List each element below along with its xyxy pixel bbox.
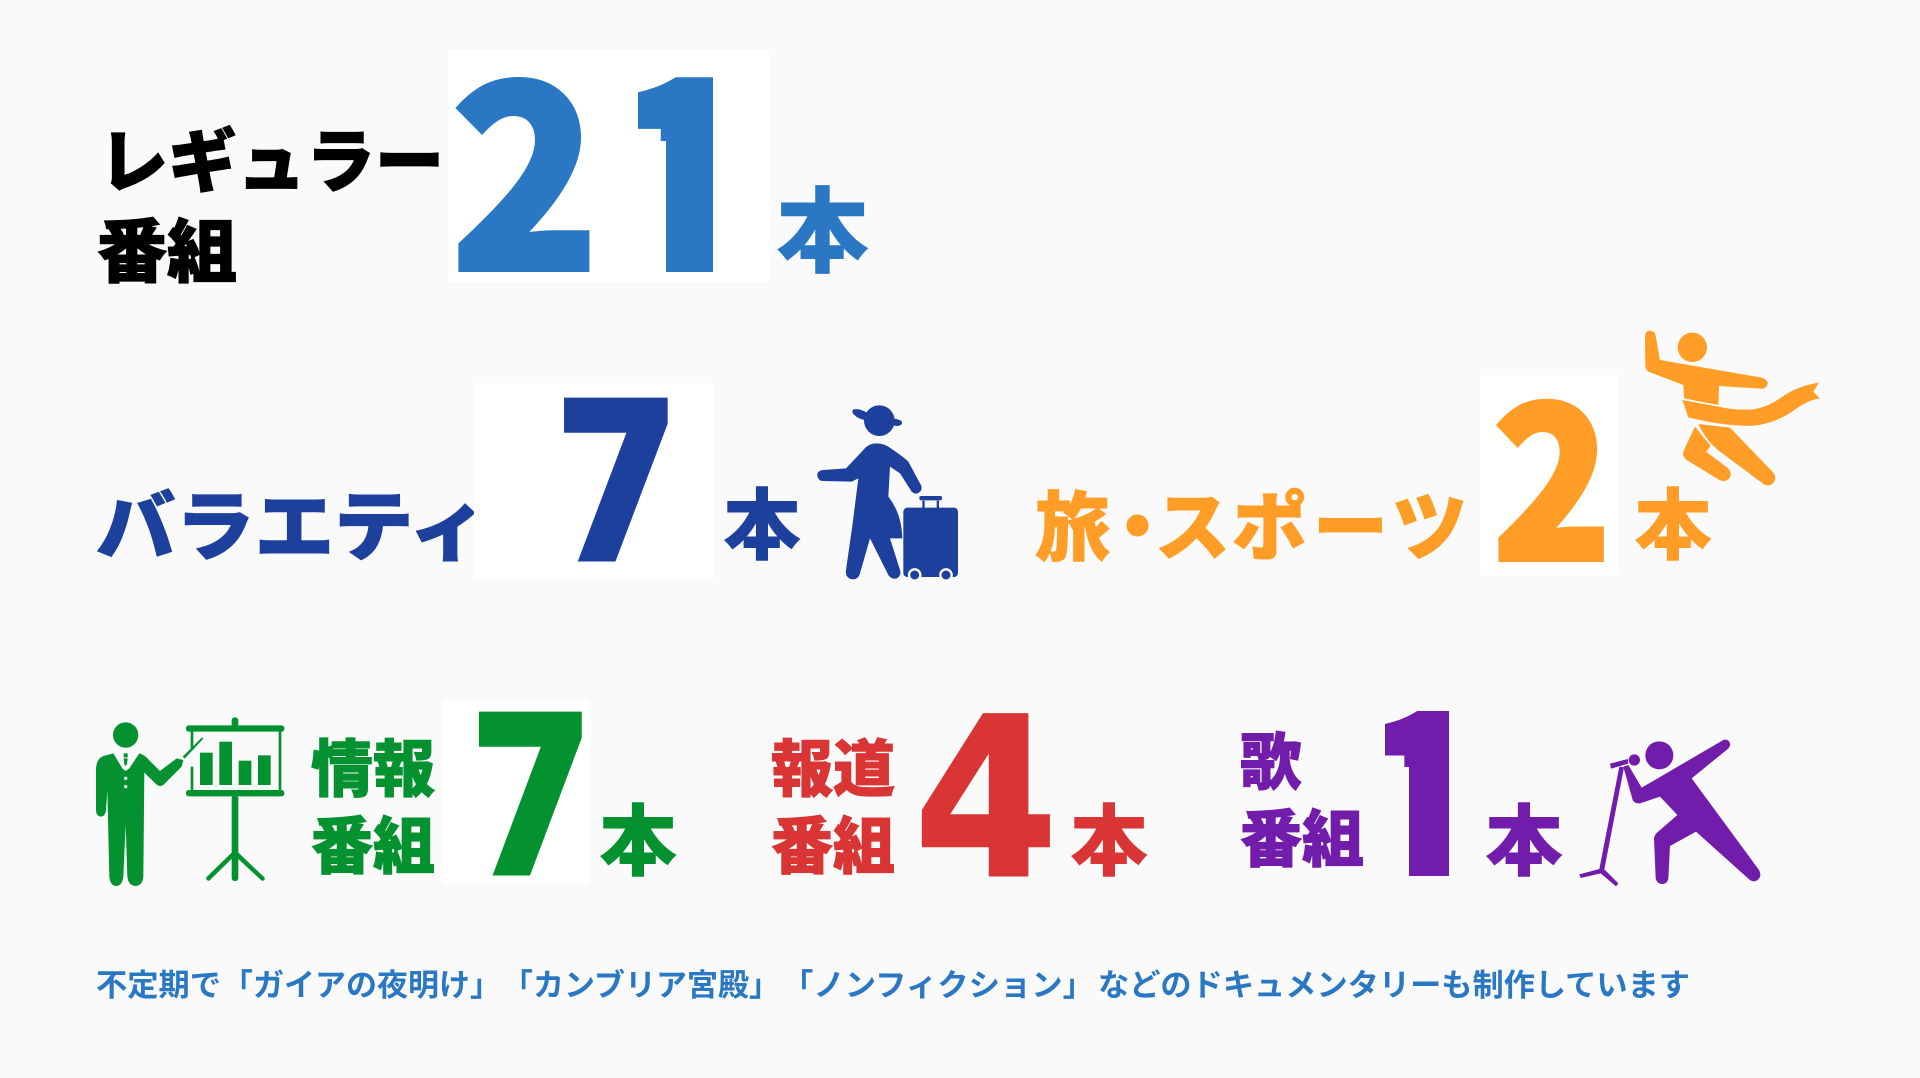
number panel: 7: 7 xyxy=(469,672,594,925)
footnote: 「ノンフィクション」 xyxy=(782,968,1094,1003)
row: regular programmes 21 xyxy=(97,77,868,284)
unit: 本: 本 xyxy=(1070,798,1148,886)
heading: news programmes: 番組 xyxy=(771,813,895,882)
icon: traveller with suitcase xyxy=(817,405,958,581)
row: music 1 xyxy=(1240,711,1760,886)
number: 4: 4 xyxy=(914,671,1058,927)
heading: variety: バラエティ xyxy=(96,486,488,571)
heading: news programmes xyxy=(771,736,895,882)
heading: information programmes: 番組 xyxy=(311,813,435,882)
row: travel and sports 2 xyxy=(1035,317,1820,621)
heading: music programmes xyxy=(1240,729,1364,875)
heading: information programmes xyxy=(311,736,435,882)
row: information 7 xyxy=(96,672,677,925)
footnote: などのドキュメンタリーも制作しています xyxy=(1098,968,1690,1003)
icon: singer at microphone xyxy=(1579,740,1760,886)
heading: regular programmes: レギュラー xyxy=(99,124,444,201)
unit: 本: 本 xyxy=(599,798,677,886)
footnote: 不定期で xyxy=(96,968,221,1003)
icon: presenter with chart xyxy=(96,717,284,886)
number panel: 7: 7 xyxy=(554,358,680,611)
number: 1: 1 xyxy=(1354,625,1492,938)
heading: information programmes: 情報 xyxy=(311,736,435,805)
unit: 本: 本 xyxy=(1634,482,1712,570)
number panel: 2: 2 xyxy=(1492,317,1612,621)
unit: 本: 本 xyxy=(723,482,801,570)
heading: news programmes: 報道 xyxy=(771,736,895,805)
heading: travel and sports: 旅・スポーツ xyxy=(1035,486,1467,570)
row: variety 7 xyxy=(96,358,958,611)
footnote: 「ガイアの夜明け」 xyxy=(222,968,501,1003)
heading: music programmes: 歌 xyxy=(1240,729,1302,798)
unit: 本: 本 xyxy=(1485,798,1563,886)
number panel: 7 xyxy=(474,358,714,611)
unit: 本: 本 xyxy=(776,181,869,285)
number panel: 7 xyxy=(442,672,594,925)
infographic canvas xyxy=(96,77,1820,999)
number panel: 21 xyxy=(456,77,713,272)
icon: runner crossing finish tape xyxy=(1645,331,1820,486)
heading: regular programmes xyxy=(97,124,444,291)
footnote: 「カンブリア宮殿」 xyxy=(502,968,780,1003)
heading: music programmes: 番組 xyxy=(1240,806,1364,875)
row: news 4 xyxy=(771,671,1148,927)
heading: regular programmes: 番組 xyxy=(97,214,237,291)
